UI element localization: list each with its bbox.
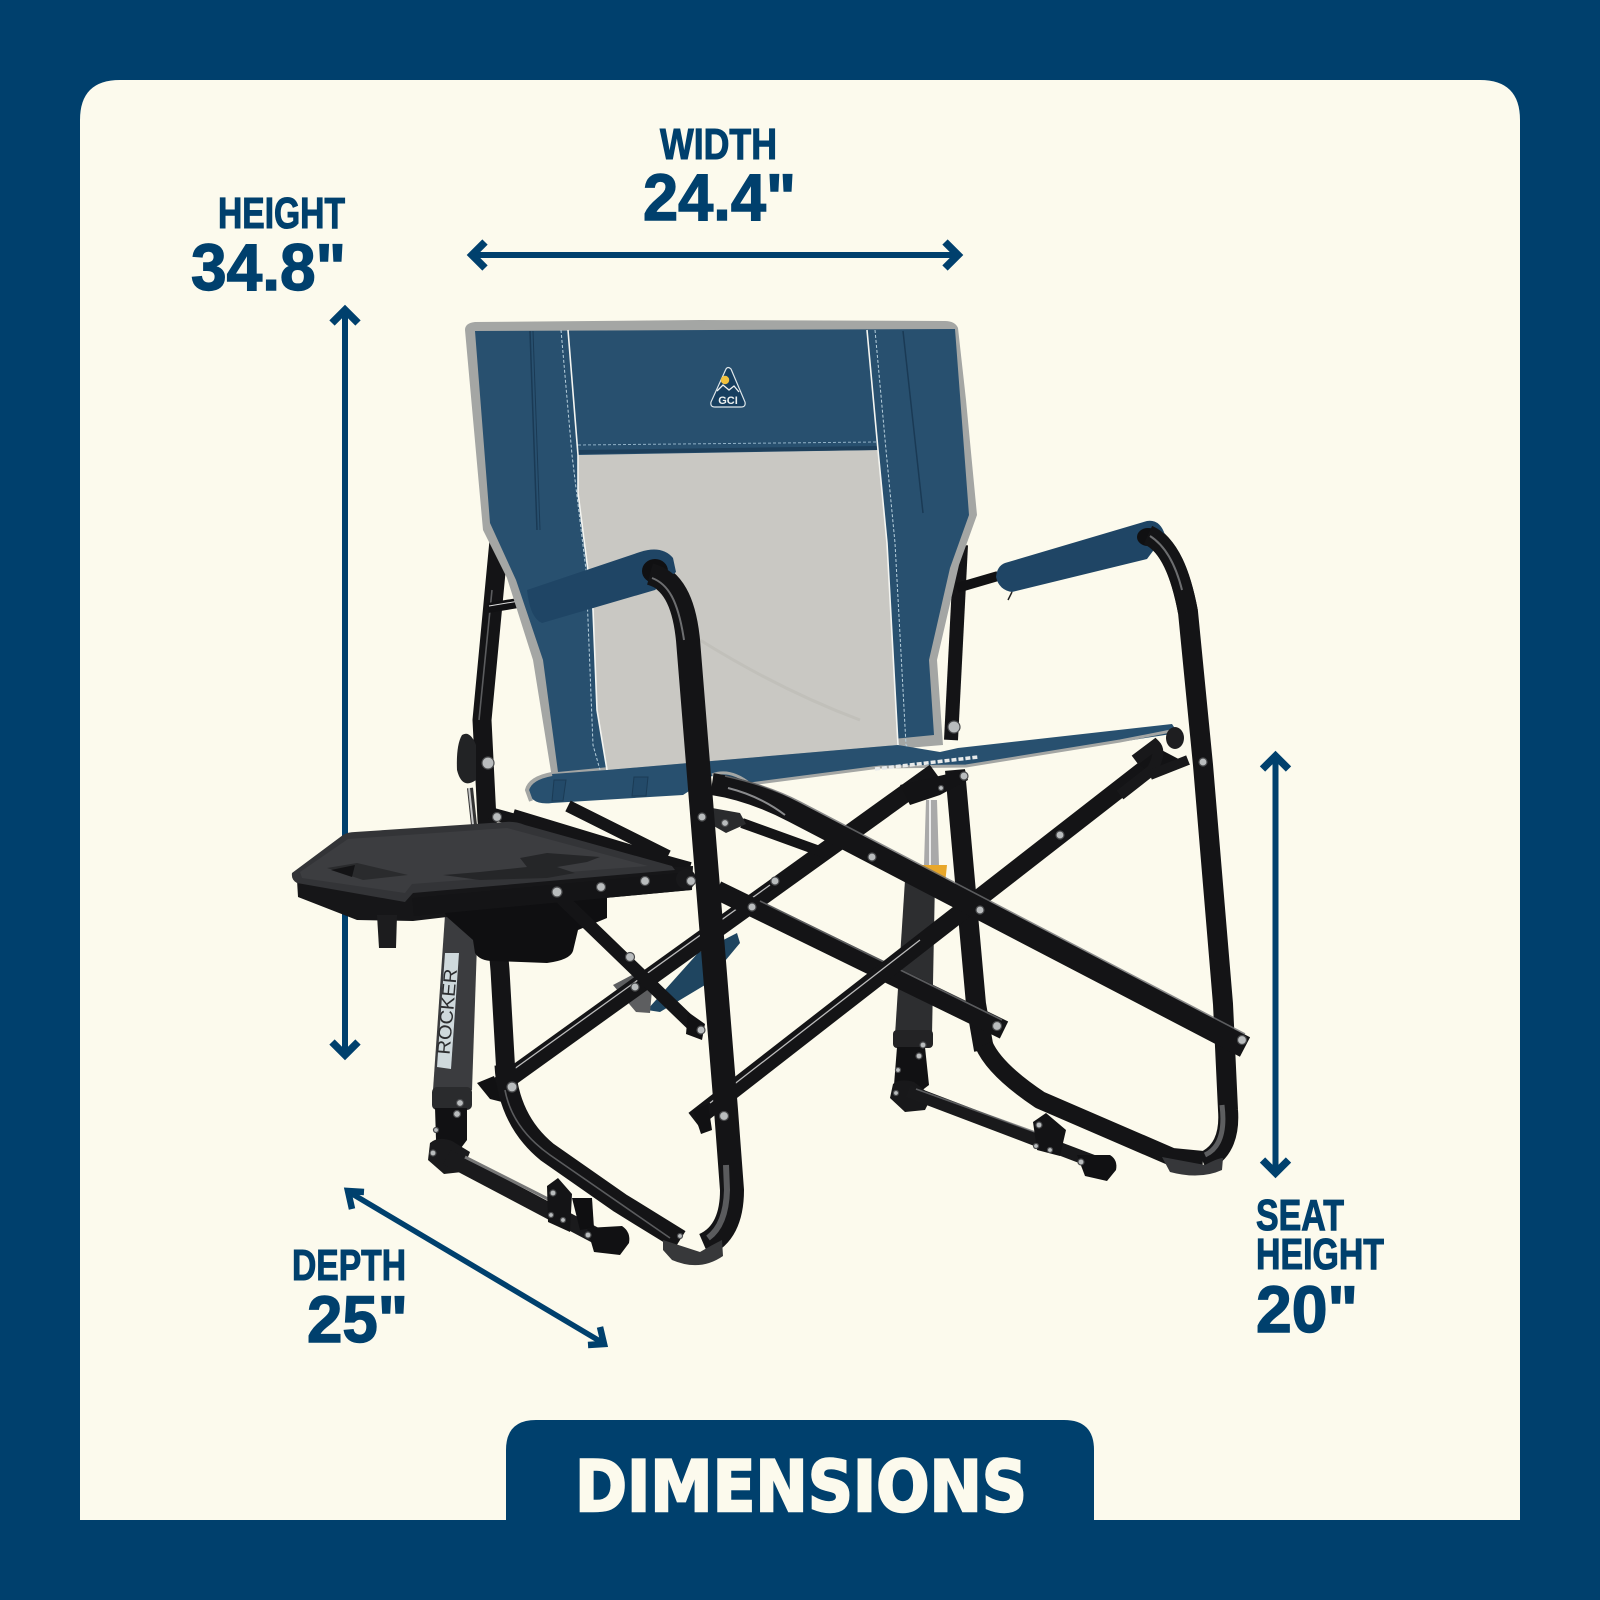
chair illustration	[292, 320, 1246, 1265]
logo badge: GCI	[718, 395, 738, 407]
rear right rocker cylinder and shaft	[890, 800, 947, 1112]
depth label: DEPTH	[292, 1242, 406, 1290]
rear uprights and support bars	[457, 530, 998, 1075]
side table	[292, 806, 705, 1040]
rivets and bolts	[430, 721, 1246, 1238]
cross bars	[477, 765, 1150, 1134]
armrest left	[527, 550, 688, 640]
width label	[643, 121, 796, 234]
piping and stitching	[530, 330, 923, 770]
arrow: width	[472, 242, 958, 268]
width label: WIDTH	[660, 121, 777, 169]
depth label: 25"	[307, 1282, 408, 1356]
tray cup recess	[443, 853, 600, 880]
logo badge	[711, 368, 745, 407]
seat fabric	[527, 724, 1178, 803]
tray arm brace	[556, 893, 700, 1032]
height label: 34.8"	[191, 230, 346, 304]
rear left rocker cylinder	[428, 915, 478, 1174]
left rocker foot lever	[447, 1157, 629, 1255]
depth label	[292, 1242, 408, 1356]
title tab	[506, 1420, 1094, 1528]
armrest right	[996, 521, 1188, 612]
back fabric	[465, 320, 977, 778]
arrow: seat height	[1262, 756, 1288, 1174]
rocker frame left	[505, 572, 732, 1265]
right rocker foot lever	[908, 1089, 1116, 1181]
title: DIMENSIONS	[575, 1446, 1027, 1528]
seat height label: HEIGHT	[1256, 1231, 1384, 1279]
seat height label	[1256, 1192, 1384, 1346]
rocker label	[433, 953, 461, 1069]
under seat fabric and bracket	[613, 933, 740, 1013]
arrow: height	[332, 310, 358, 1055]
back panel grey mesh	[578, 450, 898, 770]
rocker label: ROCKER	[433, 968, 461, 1055]
arrow: depth	[348, 1191, 604, 1345]
width label: 24.4"	[643, 160, 796, 234]
height label	[191, 190, 346, 304]
seat rail bracket	[742, 823, 825, 853]
seat height label: SEAT	[1256, 1192, 1344, 1240]
tray phone recess	[327, 863, 408, 880]
height label: HEIGHT	[218, 190, 345, 238]
big cross bar	[712, 776, 1245, 1047]
seat height label: 20"	[1256, 1272, 1358, 1346]
rocker frame right	[900, 532, 1228, 1176]
